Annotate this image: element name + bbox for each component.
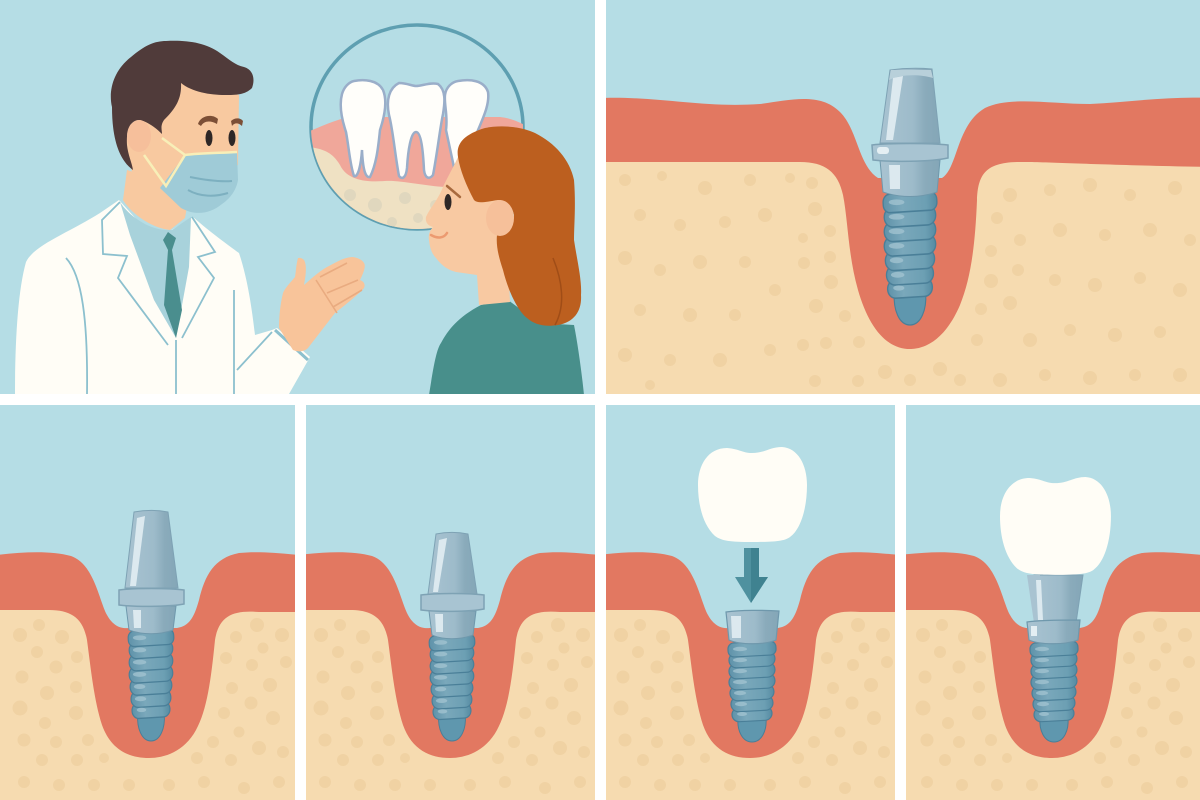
panel: final crown: [892, 405, 1200, 800]
arrow: [735, 548, 768, 603]
tie: [163, 232, 182, 338]
face and neck: [426, 157, 510, 305]
mouth: [431, 233, 447, 237]
shirt: [120, 202, 191, 338]
hand lines: [316, 263, 362, 313]
mask: [160, 152, 238, 213]
panel: implant in jaw with abutment, large: [600, 0, 1200, 400]
eye: [444, 194, 452, 210]
ear: [486, 200, 514, 236]
eyebrow: [447, 186, 460, 197]
implant: [421, 532, 484, 741]
eyes: [206, 130, 236, 146]
implant: threaded post: [883, 191, 937, 325]
hand: [279, 257, 365, 351]
bone: [600, 155, 1200, 400]
hair strand: [553, 258, 562, 325]
implant: abutment: [872, 68, 948, 161]
sweater: [429, 300, 584, 395]
implant: [1027, 575, 1083, 742]
magnified teeth circle: [300, 25, 530, 240]
hair: [458, 126, 581, 326]
crown: [1000, 477, 1111, 575]
eyebrows: [198, 116, 243, 126]
tooth: right: [445, 80, 488, 172]
face: [126, 83, 239, 182]
gum: [600, 98, 1200, 349]
panel: crown placement: [590, 405, 910, 800]
patient: [426, 126, 584, 395]
implant: [726, 610, 779, 742]
panel: consultation: [0, 0, 595, 395]
ear: [127, 120, 151, 152]
tooth: left: [341, 80, 385, 177]
doctor: [15, 41, 365, 394]
implant: lower neck: [880, 160, 940, 196]
neck: [123, 170, 190, 230]
lab coat: [15, 200, 310, 394]
implant: [119, 510, 184, 741]
coat lapels: [66, 202, 272, 394]
sleeve cuff: [275, 330, 308, 360]
panel: healing step one: [0, 405, 309, 800]
panel: healing step two: [290, 405, 610, 800]
bone dots: [618, 171, 1196, 390]
tooth: middle: [388, 83, 444, 178]
mask straps and folds: [144, 138, 237, 186]
crown: [698, 447, 807, 542]
hair: [111, 41, 253, 170]
